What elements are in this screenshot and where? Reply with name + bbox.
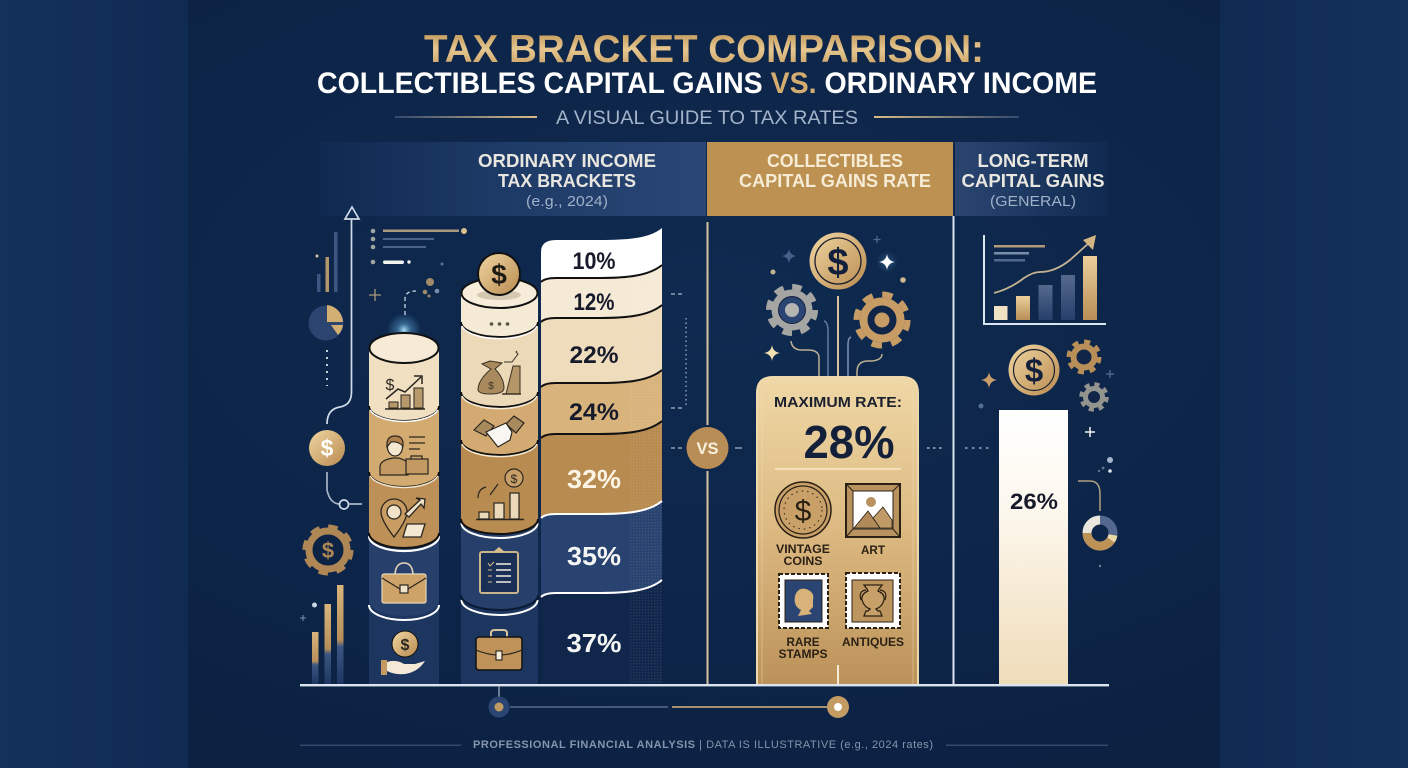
icon: gold gear (1069, 342, 1099, 372)
band dividers (541, 265, 662, 597)
band navy (461, 500, 538, 610)
baseline (300, 684, 1109, 686)
band 3 (369, 460, 439, 551)
icon: growth chart with coin: $ (511, 472, 518, 486)
three dots (490, 322, 509, 326)
band gold (461, 380, 538, 457)
column header: ordinary income: TAX BRACKETS (498, 170, 636, 191)
icon: briefcase (382, 563, 426, 603)
band tan (461, 430, 538, 534)
icon: dollar gear (306, 528, 350, 572)
icon: dollar coin (309, 430, 345, 466)
band 35% (541, 501, 662, 597)
connector dots right of card (927, 447, 944, 449)
mini bars top (316, 232, 338, 292)
icon: money bag and chart: $ (488, 381, 494, 392)
icon: coin in hand (381, 631, 425, 675)
long-term chart (984, 235, 1106, 324)
percentages: 32% (567, 464, 621, 494)
edge texture (630, 372, 662, 682)
icon: framed art (846, 484, 900, 537)
icon: dollar gear: $ (322, 538, 334, 563)
band bottom (461, 590, 538, 685)
long-term icons (965, 342, 1114, 473)
left decorative icons (300, 207, 467, 685)
icon: pie chart (308, 305, 344, 340)
column header: ordinary income: ORDINARY INCOME (478, 150, 656, 171)
icon: vintage coin: $ (795, 495, 812, 528)
icon: donut chart (1078, 481, 1113, 567)
column dividers (708, 216, 954, 685)
band 22% (541, 305, 662, 387)
icon: growth chart with coin (476, 469, 524, 520)
icon: gold gear (856, 294, 908, 346)
cylinder stack: tax brackets (461, 253, 538, 685)
column header: collectibles: CAPITAL GAINS RATE (739, 170, 931, 191)
band 1 (369, 348, 439, 421)
icon: coin on stack: $ (491, 259, 507, 290)
sparkles (764, 236, 906, 361)
icon: dollar coin (810, 232, 866, 290)
column header: long-term: (GENERAL) (990, 193, 1076, 210)
icon: dollar coin (1008, 344, 1060, 396)
icon: dollar coin: $ (321, 435, 334, 461)
title line 1: TAX BRACKET COMPARISON: (424, 28, 984, 71)
wires (791, 296, 882, 378)
light glow (387, 313, 421, 347)
mini bars bottom (300, 585, 344, 685)
column header: collectibles (707, 142, 953, 216)
sparkles and dots (965, 370, 1114, 473)
percentages: 22% (570, 342, 618, 369)
percentages: 10% (572, 248, 616, 275)
column header: long-term: LONG-TERM (978, 150, 1088, 171)
band 5 (369, 590, 439, 685)
band 4 (369, 500, 439, 616)
column header: long-term (955, 142, 1108, 216)
VS badge (686, 427, 742, 469)
cylinder stack: income types (369, 313, 439, 685)
footer: PROFESSIONAL FINANCIAL ANALYSIS | DATA IS ILLUSTRATIVE (e.g., 2024 rates) (473, 739, 933, 751)
label: vintage coins: VINTAGE (776, 544, 830, 556)
column header: long-term: CAPITAL GAINS (962, 170, 1104, 191)
collectibles icons above card (764, 232, 908, 378)
icon: coin on stack (477, 253, 521, 300)
list lines top (369, 228, 467, 315)
icon: person (380, 436, 428, 475)
dotted line (326, 350, 328, 386)
header row (320, 142, 1108, 216)
collectibles card (757, 377, 918, 685)
band 12% (541, 265, 662, 322)
icon: growth chart (385, 376, 425, 409)
VS badge: VS (696, 440, 719, 458)
percentages: 37% (566, 628, 622, 658)
percentages (566, 248, 622, 658)
band 10% (541, 228, 662, 282)
icon: growth chart: $ (386, 377, 395, 394)
band 37% (541, 580, 662, 685)
long-term bar (999, 410, 1068, 685)
icon: briefcase (476, 630, 522, 670)
column header: ordinary income (320, 142, 706, 216)
dashed connectors (671, 294, 686, 448)
icon: antique stamp (846, 573, 900, 628)
title (317, 28, 1097, 100)
cylinder top (370, 333, 438, 363)
subtitle: A VISUAL GUIDE TO TAX RATES (556, 107, 858, 129)
icon: handshake (474, 416, 524, 447)
icon: rare stamp (779, 574, 828, 628)
icon: dollar coin: $ (827, 242, 849, 284)
column header: ordinary income: (e.g., 2024) (526, 193, 608, 210)
icon: clipboard (480, 547, 518, 593)
icon: location and laptop (381, 498, 425, 537)
label: stamps: STAMPS (778, 649, 828, 661)
cylinder top (462, 278, 538, 308)
label: rare: RARE (786, 637, 820, 649)
long-term bar: 26% (1010, 489, 1058, 514)
card rate: 28% (804, 416, 894, 468)
icon: coin in hand: $ (401, 637, 410, 654)
percentages: 35% (567, 541, 621, 571)
column header: collectibles: COLLECTIBLES (767, 150, 903, 171)
icon: upward arrow path (327, 207, 362, 509)
timeline nodes (488, 686, 849, 718)
icon: money bag and chart (478, 351, 521, 394)
band 2 (369, 400, 439, 487)
label: antiques: ANTIQUES (842, 637, 904, 649)
percentages: 24% (569, 399, 619, 426)
icon: grey gear (1082, 384, 1106, 410)
icon: grey gear (769, 287, 815, 333)
band 32% (541, 421, 662, 518)
band 24% (541, 370, 662, 438)
title line 2: COLLECTIBLES CAPITAL GAINS VS. ORDINARY INCOME (317, 67, 1097, 100)
label: art: ART (861, 545, 885, 557)
tax bracket table (541, 225, 686, 685)
card heading: MAXIMUM RATE: (774, 395, 902, 411)
icon: vintage coin (775, 482, 831, 538)
band light (461, 320, 538, 409)
percentages: 12% (574, 289, 614, 316)
label: coins: COINS (784, 556, 823, 568)
icon: dollar coin: $ (1025, 352, 1043, 389)
band cream (461, 293, 538, 339)
